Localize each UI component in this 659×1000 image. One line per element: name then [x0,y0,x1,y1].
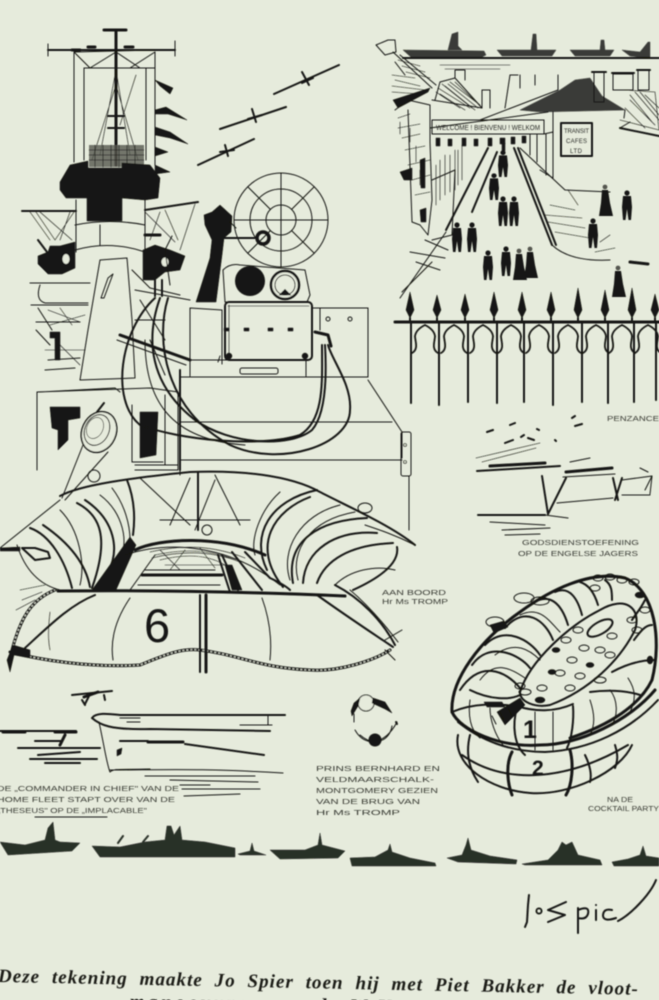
caption: prins bernhard: MONTGOMERY GEZIEN [316,786,438,795]
small carrier left [0,731,100,763]
arm and ring [222,222,269,244]
third carrier [622,468,652,495]
hull base line [58,591,345,596]
illustration: raft after the cocktail party [452,574,658,795]
raft net top [0,470,415,548]
radar dish [234,173,328,267]
illustration: life raft number 6 [0,470,415,672]
cafe sign: LTD [570,149,583,155]
illustration: gun housing [37,370,180,500]
black hole edge [92,537,136,590]
caption: na de cocktail party: NA DE [607,795,633,804]
storefront on right [430,112,553,178]
signal flags [155,80,188,174]
sailors [452,143,648,297]
caption: prins bernhard: VAN DE BRUG VAN [316,797,420,806]
cafe sign [561,123,592,156]
caption: commander in chief: DE „COMMANDER IN CHIEF" VAN DE [0,784,179,793]
caption: na de cocktail party [588,795,659,813]
plane 3 [274,65,339,94]
spikes [406,288,659,322]
main bow [92,714,285,785]
ships on horizon [376,32,659,69]
inner well [125,540,290,592]
lower raft 2 [457,735,632,795]
caption: aan boord: AAN BOORD [382,588,447,597]
caption: prins bernhard: VELDMAARSCHALK- [316,775,435,784]
pickets [411,322,656,405]
ship 4 [270,833,345,859]
left houses [392,52,462,240]
illustration: ship mast and bridge tower [22,30,198,380]
right ring ribs [254,490,397,590]
gauges [223,265,310,302]
lower raft 2: 2 [532,757,544,780]
ring ribs [452,580,655,712]
cafe sign: TRANSIT [564,129,589,135]
caption: aan boord: Hr Ms TROMP [382,597,448,606]
caption: commander in chief [0,784,260,817]
upper raft ring [452,576,658,755]
signature [525,880,656,933]
second carrier [557,458,622,503]
ship 7 [522,842,602,865]
caption: commander in chief: „THESEUS" OP DE „IMPLACABLE" [0,806,147,815]
caption: godsdienstoefening: GODSDIENSTOEFENING [522,538,639,547]
ship 1 [0,822,80,855]
caption: penzance: PENZANCE [607,414,659,423]
ship 5 [350,844,436,866]
cafe sign: CAFES [566,139,587,145]
number 6: 6 [144,599,170,652]
pedestal [196,205,232,302]
illustration: church service on the English carriers [476,416,652,535]
lower left deck detail [30,283,90,370]
caption: prins bernhard [316,764,440,817]
plane 1 [198,139,254,165]
table with glasses [484,574,653,725]
ship 3 small [238,843,266,855]
caption: prins bernhard: Hr Ms TROMP [316,808,400,817]
illustration: row of ships [0,822,659,866]
flying birds or planes [487,416,582,443]
arches [412,325,659,353]
left ring ribs [0,480,134,590]
control box [224,302,312,360]
illustration: aircraft carrier bow with plane [0,691,285,785]
street lines [400,148,615,298]
plane 2 [220,107,286,129]
ship 2 [92,826,235,857]
mast top and yard [48,30,175,165]
ship 8 [612,846,659,866]
caption: prins bernhard: PRINS BERNHARD EN [316,764,440,773]
black platform [60,161,160,221]
illustration: radar dish and pedestal [117,173,411,530]
illustration: street with sailors in Penzance [376,32,659,298]
bridge body [75,200,145,252]
illustration: iron fence [395,288,659,405]
caption: godsdienstoefening [518,538,639,558]
armoured slanted mount [80,236,190,380]
right roofs and chimneys [480,70,659,136]
hull and bottom rope [7,585,402,672]
caption: commander in chief: HOME FLEET STAPT OVER VAN DE [0,795,175,804]
ship 6 [447,838,517,864]
upper raft ring: 1 [523,716,537,744]
caption: aan boord [382,588,448,606]
left wing with gun [22,202,198,280]
equipment table [117,308,411,530]
welcome banner [432,120,544,146]
caption: na de cocktail party: COCKTAIL PARTY [588,804,659,813]
illustration: three planes [198,65,339,165]
welcome banner: WELCOME ! BIENVENU ! WELKOM [436,123,540,132]
cables [122,280,350,454]
small plane [72,691,112,705]
left roofs [432,70,490,110]
first carrier [476,443,568,535]
mast frame and rigging [74,50,155,167]
illustration: Bernhard and Montgomery seen from above [351,695,397,746]
caption text: Deze tekening maakte Jo Spier toen hij met Piet Bakker de vloot- [0,966,638,1000]
rail [395,320,659,324]
caption: godsdienstoefening: OP DE ENGELSE JAGERS [518,549,638,558]
